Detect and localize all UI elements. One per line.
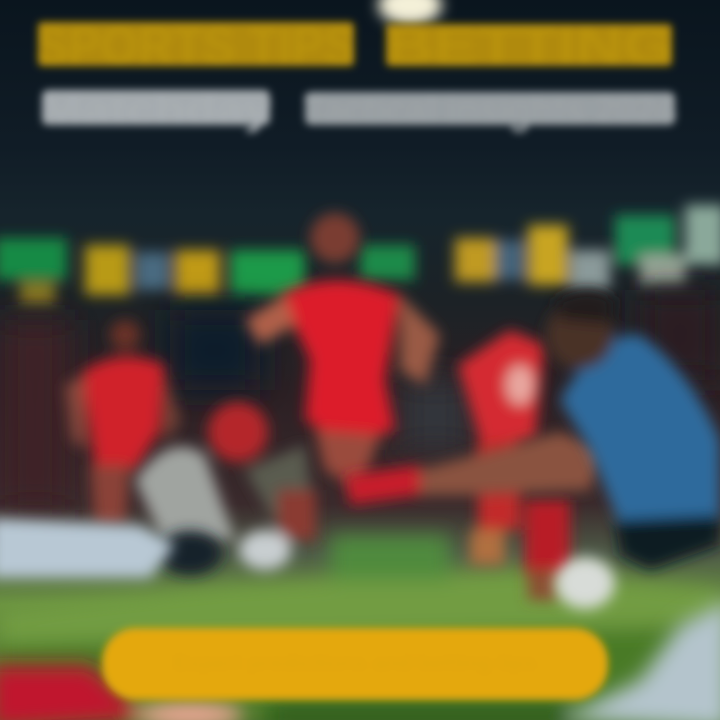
- player: blue foreground: [546, 290, 720, 570]
- title line 1: SPORTS TIPS: [36, 16, 356, 76]
- pale banner at left: [0, 518, 175, 578]
- title line 1: [36, 16, 674, 76]
- outstretched red leg and arm: [345, 432, 605, 505]
- title line 2: [40, 86, 677, 133]
- stadium bunting flags: [0, 205, 720, 304]
- player: left in red: [65, 320, 180, 525]
- title line 2: Matchday: [40, 86, 273, 133]
- title: [36, 16, 677, 133]
- player: white kit crouching: [135, 402, 316, 570]
- floodlight at top: [378, 0, 442, 25]
- football and boot: [158, 531, 615, 609]
- crowd background: [0, 290, 720, 510]
- call to action button: Expert predictions and betting tips: [173, 650, 537, 675]
- corner shapes: [0, 600, 720, 720]
- player: central in red: [245, 213, 440, 490]
- call to action button: [102, 628, 608, 700]
- pitch: [0, 535, 720, 720]
- title line 1: BETTING: [386, 16, 674, 76]
- player: right in red: [458, 330, 570, 600]
